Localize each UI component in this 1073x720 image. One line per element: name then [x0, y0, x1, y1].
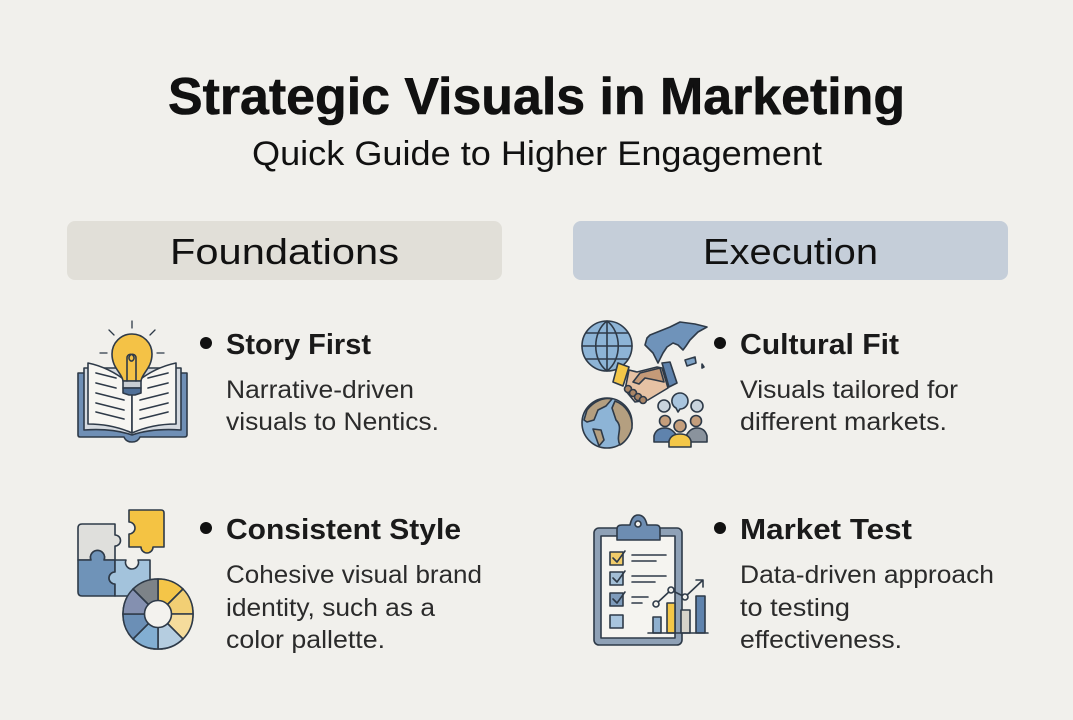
panel: execution header	[573, 221, 1008, 280]
description: visuals to Nentics.	[226, 408, 439, 436]
description: different markets.	[740, 408, 947, 436]
bullet	[714, 522, 726, 534]
panel: foundations header: Foundations	[170, 231, 399, 272]
icon: puzzle pieces and colour wheel	[78, 510, 193, 649]
item: market test	[594, 514, 994, 654]
heading: Market Test	[740, 514, 912, 546]
heading: Cultural Fit	[740, 329, 899, 361]
description: Visuals tailored for	[740, 376, 958, 404]
bullet	[200, 522, 212, 534]
description: to testing	[740, 594, 850, 622]
description: color pallette.	[226, 626, 385, 654]
heading: Story First	[226, 329, 371, 361]
bullet	[200, 337, 212, 349]
panel: execution header: Execution	[703, 231, 878, 272]
description: effectiveness.	[740, 626, 902, 654]
description: Cohesive visual brand	[226, 561, 482, 589]
description: Data-driven approach	[740, 561, 994, 589]
bullet	[714, 337, 726, 349]
item: consistent style	[78, 510, 482, 654]
subtitle: Quick Guide to Higher Engagement	[252, 135, 823, 173]
title: Strategic Visuals in Marketing	[168, 68, 905, 126]
description: Narrative-driven	[226, 376, 414, 404]
icon: clipboard checklist with chart	[594, 515, 708, 645]
panel: foundations header	[67, 221, 502, 280]
description: identity, such as a	[226, 594, 435, 622]
item: cultural fit	[582, 321, 958, 448]
heading: Consistent Style	[226, 514, 461, 546]
item: story first	[78, 321, 439, 442]
icon: globes, handshake and people	[582, 321, 707, 448]
icon: open book with light bulb	[78, 321, 187, 442]
